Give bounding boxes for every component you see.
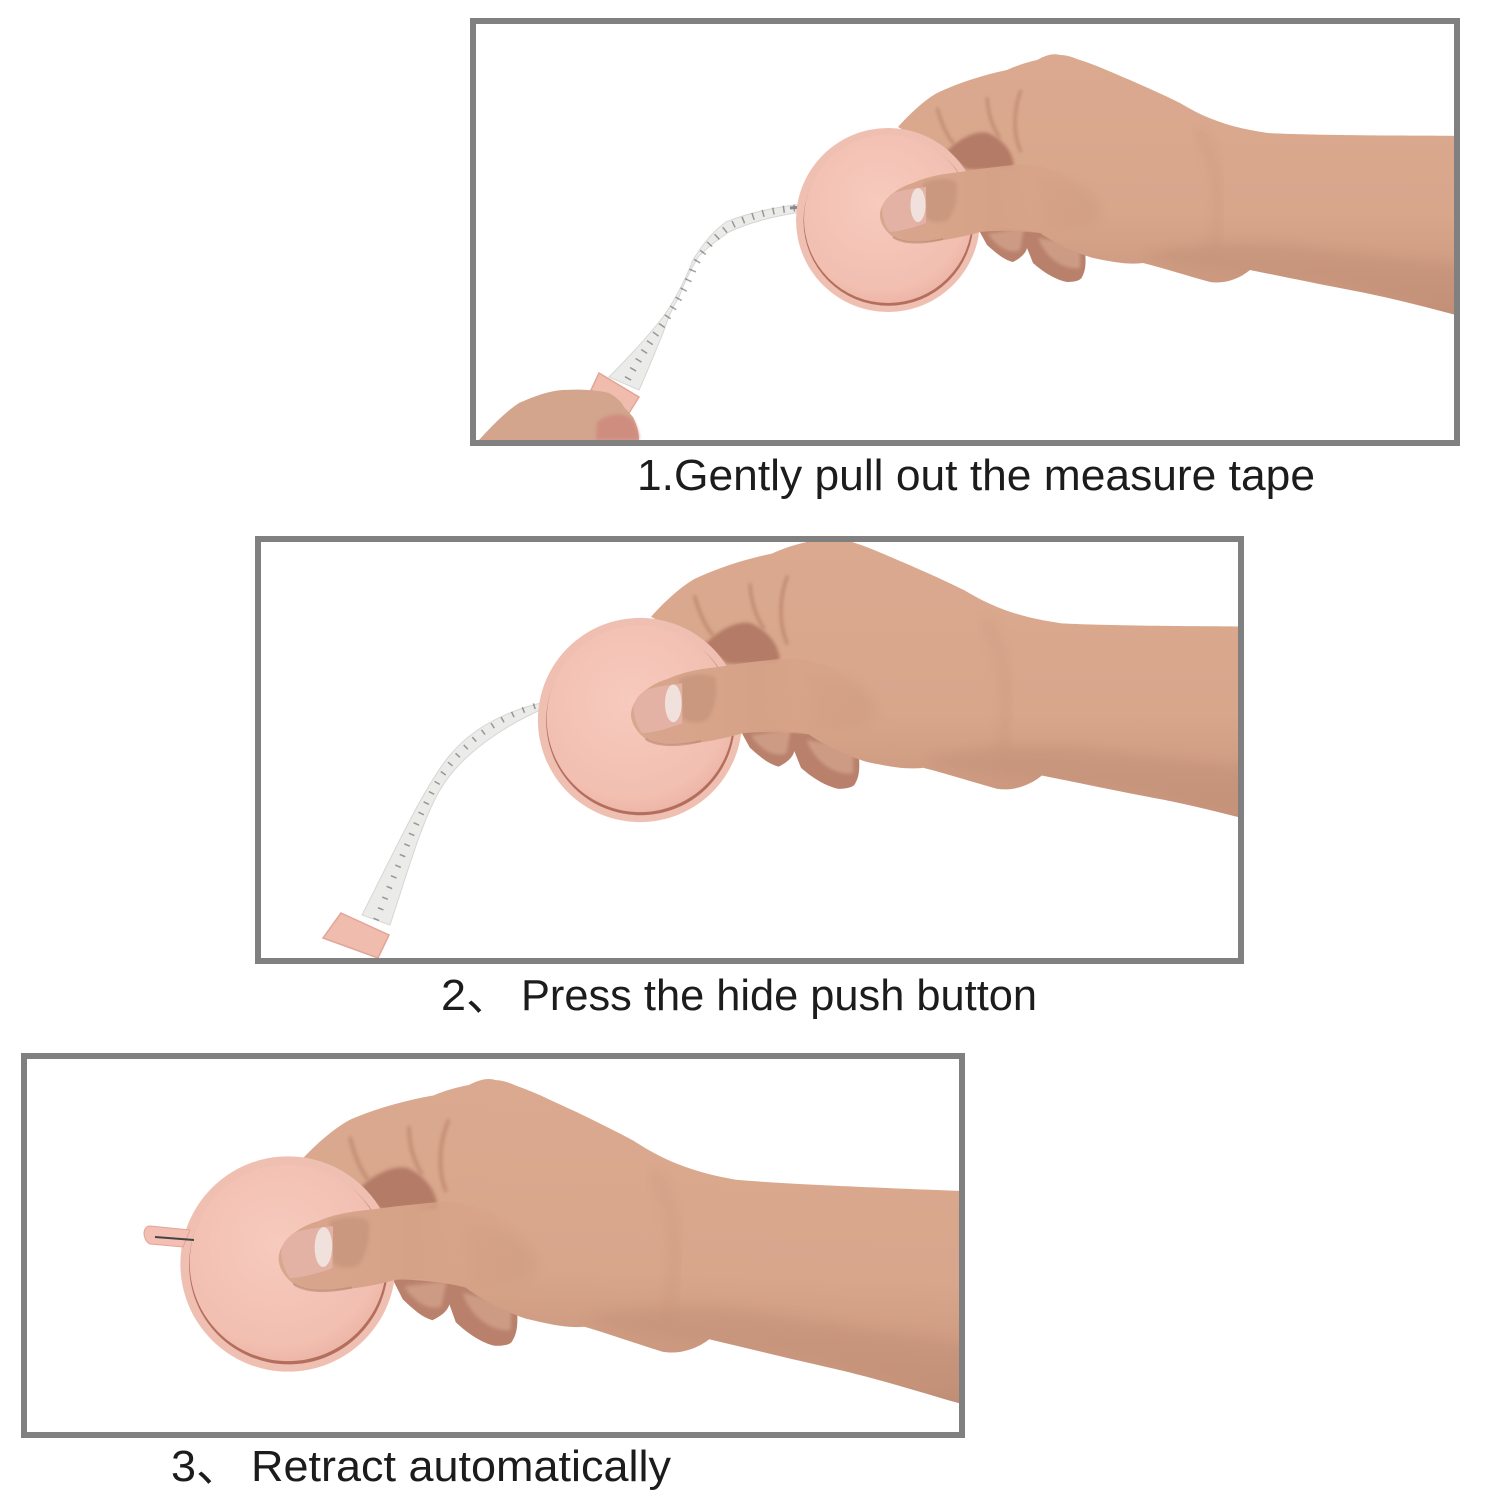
- thumb: [278, 1202, 438, 1292]
- step 1 photo area: [479, 54, 1500, 440]
- thumb: [631, 659, 808, 746]
- tape measure disc: [180, 1156, 396, 1372]
- step 3 number: 3、: [171, 1442, 241, 1491]
- step 2 photo area: [322, 542, 1238, 958]
- main hand: [898, 54, 1454, 314]
- step 3 instruction: Retract automatically: [251, 1442, 671, 1491]
- main hand: [304, 1079, 959, 1404]
- caption: step 1: 1.Gently pull out the measure tape: [637, 451, 1315, 500]
- step 1 frame: [473, 21, 1457, 443]
- step 2 instruction: Press the hide push button: [521, 971, 1037, 1020]
- tape measure disc: [538, 618, 742, 822]
- tape end tab: [323, 913, 389, 958]
- retracted tape tab: [144, 1226, 194, 1247]
- step 2 frame: [258, 539, 1241, 961]
- step 3 frame: [24, 1056, 962, 1435]
- panel: step 3: [21, 1053, 965, 1438]
- tape measure extended: [362, 703, 540, 926]
- tape measure extended: [609, 204, 803, 390]
- main hand: [651, 542, 1238, 817]
- panel: step 1: [473, 21, 1500, 443]
- panel: step 2: [255, 536, 1244, 964]
- step 3 photo area: [144, 1079, 959, 1404]
- second hand holding tape: [479, 390, 639, 440]
- thumb: [880, 165, 1038, 244]
- tape measure disc: [796, 128, 980, 312]
- step 2 number: 2、: [441, 971, 511, 1020]
- caption: step 2: [441, 971, 1037, 1020]
- caption: step 3: [171, 1442, 671, 1491]
- tape end tab: [591, 373, 639, 413]
